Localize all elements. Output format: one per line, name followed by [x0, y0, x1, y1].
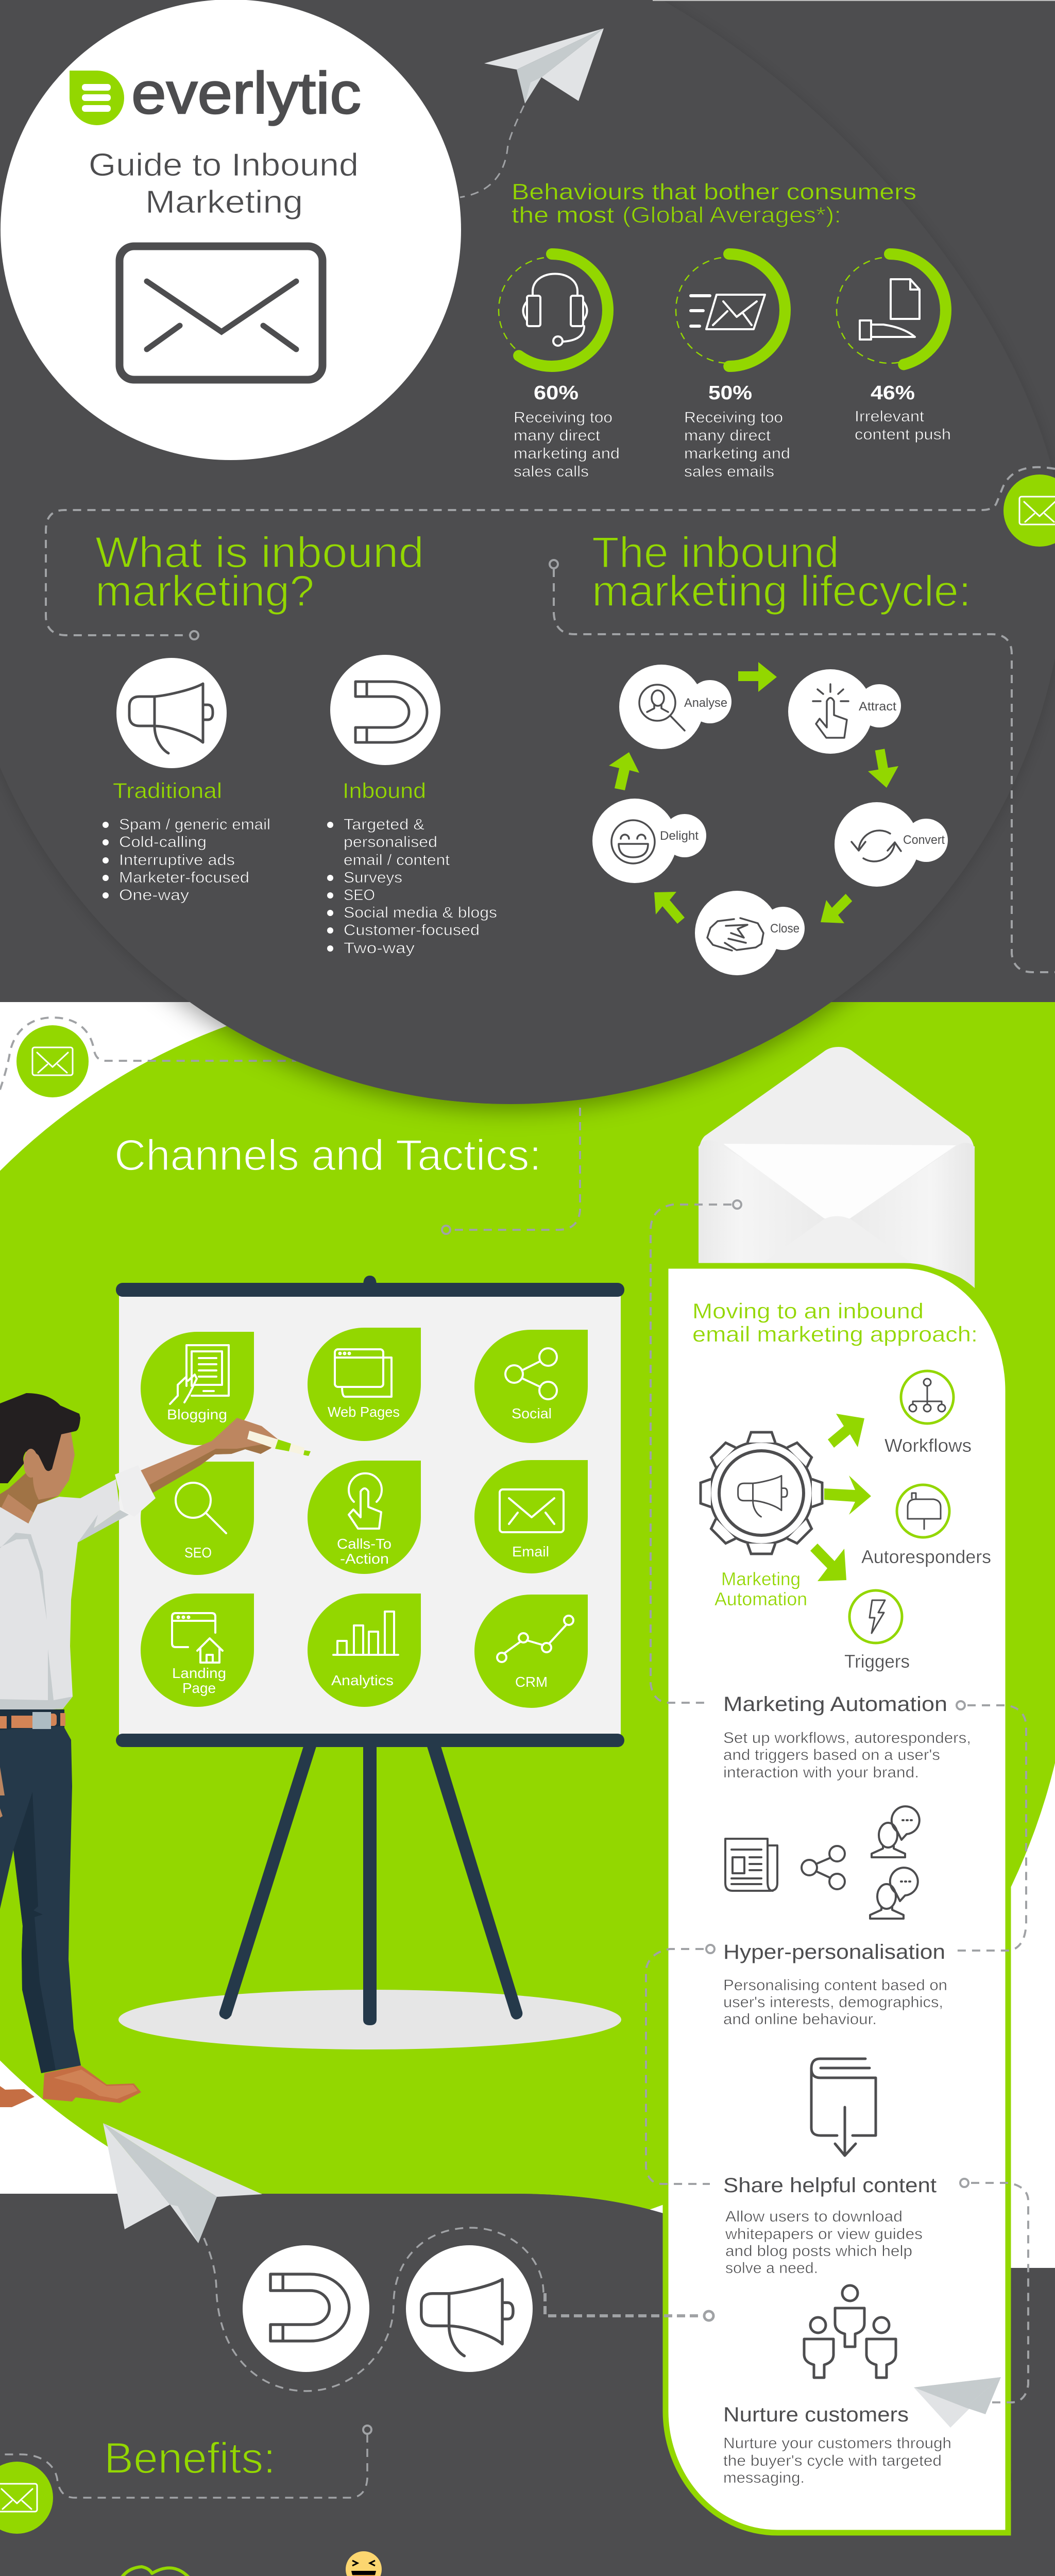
block: share helpful content	[723, 2174, 937, 2277]
column: inbound: Two-way	[344, 940, 415, 957]
mail badge benefits	[0, 2462, 53, 2534]
icon: paper plane top	[484, 28, 604, 104]
tile: calls to action: -Action	[340, 1551, 389, 1567]
block: marketing automation: and triggers based on a user's	[723, 1747, 940, 1764]
tile: email: Email	[512, 1544, 549, 1560]
column: traditional: Traditional	[113, 778, 222, 803]
connector end	[190, 631, 198, 639]
column: inbound: Inbound	[343, 778, 426, 803]
dashed connector: channels	[453, 1108, 580, 1230]
icon: triggers	[844, 1590, 910, 1672]
icon: large paper plane	[103, 2123, 262, 2243]
tile: calls to action	[308, 1461, 421, 1574]
icon: content sharing	[725, 1806, 920, 1919]
benefit icon: social buzz	[257, 2551, 413, 2576]
column: traditional: Interruptive ads	[119, 852, 235, 869]
block: hyper-personalisation	[723, 1941, 947, 2028]
icon: marketing automation gear	[701, 1432, 822, 1554]
block: marketing automation	[723, 1693, 971, 1781]
heading: behaviours: (Global Averages*):	[622, 202, 841, 228]
block: marketing automation: Marketing Automation	[723, 1693, 947, 1716]
column: traditional: Spam / generic email	[119, 816, 270, 833]
top dark circular panel	[16, 674, 1052, 1001]
connector end	[957, 1701, 965, 1709]
block: nurture customers: Nurture customers	[723, 2403, 909, 2426]
stat: 46 percent: Irrelevant	[855, 408, 925, 425]
flip chart	[116, 1276, 624, 2049]
envelope behind panel	[699, 1047, 975, 1288]
tile: blogging	[141, 1332, 254, 1445]
dashed connector: megaphone to panel	[545, 2293, 702, 2316]
column: inbound: SEO	[344, 887, 375, 904]
heading: behaviours	[512, 179, 916, 228]
block: marketing automation: Set up workflows, autoresponders,	[723, 1730, 971, 1747]
tile: social: Social	[512, 1405, 552, 1421]
arrow: to autoresponders	[824, 1476, 871, 1515]
block: share helpful content: solve a need.	[725, 2260, 818, 2277]
dark lower shape	[518, 2194, 662, 2213]
icon: workflows	[884, 1371, 972, 1456]
heading: lifecycle	[592, 528, 971, 615]
dashed frame: what is inbound	[46, 467, 1055, 635]
heading: what is inbound marketing: marketing?	[95, 567, 314, 615]
tile: landing page: Page	[182, 1680, 216, 1696]
connector end	[363, 2426, 371, 2434]
column: inbound: Customer-focused	[344, 922, 480, 939]
arrow	[654, 892, 685, 924]
dashed frame: lifecycle	[554, 569, 1055, 972]
lifecycle node: convert: Convert	[903, 833, 945, 847]
dashed connector: share to nurture	[971, 2183, 1028, 2402]
column: traditional: One-way	[119, 887, 189, 904]
block: hyper-personalisation: and online behaviour.	[723, 2011, 877, 2028]
arrow: to triggers	[810, 1544, 846, 1581]
heading: what is inbound marketing: What is inbound	[95, 528, 424, 577]
lifecycle node: delight	[592, 799, 706, 883]
icon: triggers: Triggers	[844, 1651, 910, 1672]
connector end	[550, 560, 558, 568]
tile: social	[474, 1330, 588, 1443]
heading: benefits: Benefits:	[104, 2434, 276, 2482]
heading: behaviours: the most	[512, 202, 614, 228]
column: traditional: Marketer-focused	[119, 869, 249, 886]
dashed frame: benefits	[0, 2434, 367, 2498]
label: marketing automation: Marketing	[721, 1568, 801, 1589]
left mail badge with dashed connector	[0, 1018, 296, 1097]
tile: CRM	[474, 1595, 588, 1708]
tile: SEO: SEO	[184, 1545, 212, 1561]
lifecycle node: convert	[835, 802, 948, 887]
lifecycle node: attract: Attract	[859, 700, 896, 714]
tile: blogging: Blogging	[167, 1406, 227, 1422]
icon: traditional megaphone	[116, 658, 227, 768]
mail badge right	[1003, 474, 1055, 547]
icon: autoresponders: Autoresponders	[861, 1546, 991, 1567]
block: nurture customers: messaging.	[723, 2469, 805, 2486]
stat: 60 percent: 60%	[534, 382, 578, 404]
dashed connector: hyper-personalisation to share	[646, 1949, 710, 2184]
block: hyper-personalisation: Personalising content based on	[723, 1977, 947, 1994]
arrow: to workflows	[828, 1414, 864, 1448]
lifecycle node: delight: Delight	[660, 829, 699, 843]
column: inbound: personalised	[344, 834, 437, 851]
block: share helpful content: Share helpful content	[723, 2174, 937, 2197]
icon: download book	[811, 2059, 876, 2156]
stat: 50 percent: marketing and	[684, 445, 790, 462]
panel heading	[692, 1299, 978, 1346]
panel: moving to an inbound email marketing approach	[666, 1266, 1008, 2533]
column: traditional: Cold-calling	[119, 834, 207, 851]
stat: 46 percent: content push	[855, 426, 951, 443]
stat: 50 percent	[673, 254, 790, 480]
header white circle	[1, 0, 461, 460]
tile: analytics	[308, 1594, 421, 1707]
block: share helpful content: and blog posts which help	[725, 2243, 912, 2260]
column: inbound: email / content	[344, 852, 450, 869]
stat: 50 percent: 50%	[708, 382, 752, 404]
tile: email	[474, 1460, 588, 1573]
presenter figure	[0, 1393, 311, 2107]
column: inbound: Social media & blogs	[344, 904, 497, 921]
block: share helpful content: Allow users to download	[725, 2208, 903, 2225]
arrow	[738, 662, 777, 692]
lifecycle node: close: Close	[770, 922, 799, 936]
tile: web pages	[308, 1328, 421, 1441]
tile: landing page	[141, 1594, 254, 1707]
plane trail	[460, 106, 524, 197]
label: marketing automation: Automation	[714, 1588, 807, 1609]
lifecycle node: analyse: Analyse	[684, 696, 727, 710]
title: Guide to Inbound	[89, 147, 359, 183]
benefit icon: top brands	[71, 2567, 198, 2576]
block: hyper-personalisation: Hyper-personalisation	[723, 1941, 945, 1963]
icon: megaphone circle	[406, 2245, 533, 2372]
tile: calls to action: Calls-To	[337, 1536, 392, 1552]
title	[89, 147, 359, 220]
dashed connector: envelope to marketing automation	[651, 1205, 731, 1703]
connector end	[733, 1200, 741, 1209]
tile: web pages: Web Pages	[328, 1404, 400, 1420]
lifecycle node: analyse	[619, 665, 731, 749]
lifecycle node: attract	[788, 669, 901, 754]
heading: what is inbound marketing	[95, 528, 424, 615]
stat: 50 percent: sales emails	[684, 463, 774, 480]
stat: 50 percent: Receiving too	[684, 409, 783, 426]
dark lower background	[0, 2194, 1055, 2576]
tile: analytics: Analytics	[331, 1672, 394, 1688]
green middle background	[0, 987, 1055, 2244]
tile: CRM: CRM	[515, 1674, 548, 1690]
block: hyper-personalisation: user's interests, demographics,	[723, 1994, 943, 2011]
heading: channels and tactics: Channels and Tactics:	[114, 1131, 541, 1179]
icon: small paper plane	[914, 2377, 1001, 2428]
icon: magnet circle	[243, 2245, 369, 2372]
dashed trail around magnet and megaphone	[204, 2228, 543, 2391]
title: Marketing	[145, 184, 303, 220]
stat: 50 percent: many direct	[684, 427, 771, 444]
top circle shadow over green and white	[157, 1002, 862, 1124]
column: inbound: Targeted &	[344, 816, 424, 833]
top edge line	[653, 0, 1055, 1]
block: share helpful content: whitepapers or view guides	[725, 2226, 923, 2243]
icon: large envelope	[120, 246, 322, 380]
stat: 60 percent: marketing and	[514, 445, 620, 462]
logo: everlytic: everlytic	[131, 61, 361, 126]
column: inbound	[327, 778, 497, 957]
heading: behaviours: Behaviours that bother consumers	[512, 179, 916, 205]
stat: 46 percent: 46%	[871, 382, 915, 404]
icon: inbound magnet	[330, 655, 440, 765]
icon: autoresponders	[861, 1485, 991, 1567]
block: nurture customers	[723, 2403, 951, 2486]
connector end	[442, 1226, 450, 1234]
panel heading: Moving to an inbound	[692, 1299, 924, 1323]
lifecycle node: close	[695, 891, 805, 975]
tile: SEO	[141, 1462, 254, 1575]
block: nurture customers: the buyer's cycle with targeted	[723, 2452, 942, 2469]
icon: workflows: Workflows	[884, 1435, 972, 1456]
dashed connector: automation to hyper-personalisation	[957, 1705, 1026, 1951]
arrow	[821, 894, 852, 923]
icon: people	[804, 2285, 896, 2378]
column: inbound: Surveys	[344, 869, 402, 886]
connector end	[704, 2311, 713, 2320]
block: marketing automation: interaction with your brand.	[723, 1764, 919, 1781]
top dark background	[0, 0, 1055, 1002]
connector end	[960, 2179, 968, 2187]
stat: 60 percent	[496, 254, 620, 480]
block: nurture customers: Nurture your customers through	[723, 2435, 951, 2452]
stat: 60 percent: Receiving too	[514, 409, 612, 426]
heading: lifecycle: The inbound	[592, 528, 839, 577]
stat: 46 percent	[833, 254, 951, 443]
tile: landing page: Landing	[172, 1665, 226, 1681]
connector end	[706, 1945, 714, 1953]
stat: 60 percent: sales calls	[514, 463, 589, 480]
bottom shadow on white	[0, 2164, 1055, 2576]
arrow	[868, 749, 898, 788]
heading: lifecycle: marketing lifecycle:	[592, 567, 971, 615]
label: marketing automation	[714, 1568, 807, 1609]
column: traditional	[103, 778, 270, 904]
arrow	[609, 752, 639, 790]
stat: 60 percent: many direct	[514, 427, 601, 444]
panel heading: email marketing approach:	[692, 1322, 978, 1346]
